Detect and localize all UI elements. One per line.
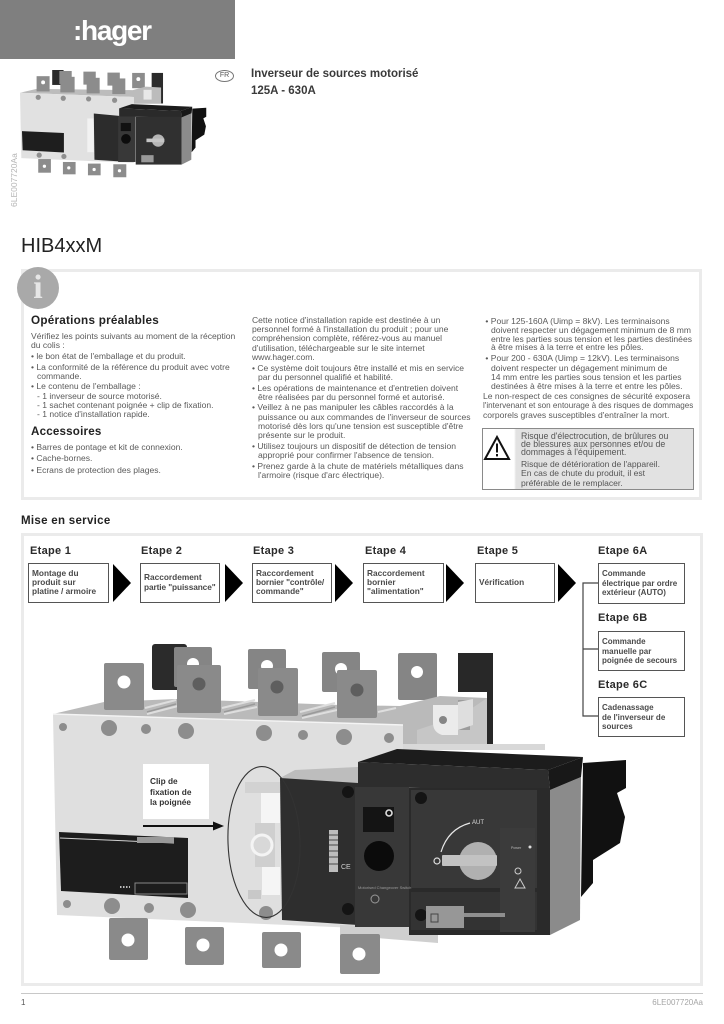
- text block: clearance requirements: 14 mm entre les parties sous tension et les parties: [491, 372, 682, 382]
- clip label text: Clip de: [150, 776, 178, 786]
- product photo: large: CE: [341, 864, 351, 871]
- text block: safety instructions: personnel formé à l'installation du produit ; pour une: [252, 324, 448, 334]
- text block: safety instructions: d'utilisation, téléchargeable sur le site internet: [252, 343, 425, 353]
- step 6A box: électrique par ordre: [602, 579, 677, 588]
- step 6A title: Etape 6A: [598, 545, 647, 557]
- text block: clearance requirements: à être mises à la terre et entre les pôles.: [491, 342, 644, 352]
- step 1 box: produit sur: [32, 577, 76, 587]
- text block: safety instructions: motorisé dès lors qu'une tension est susceptible d'être: [258, 421, 463, 431]
- step 5 box: Vérification: [479, 577, 524, 587]
- step 6A box: Commande: [602, 569, 646, 578]
- text block: accessoires: • Ecrans de protection des plages.: [31, 465, 161, 475]
- text block: operations prealables: [31, 331, 235, 419]
- text block: operations prealables: • La conformité de la référence du produit avec votre: [31, 362, 230, 372]
- text block: clearance requirements: Le non-respect de ces consignes de sécurité exposera: [483, 391, 690, 401]
- panel: mise en service: [21, 533, 703, 986]
- rating plate: [59, 832, 188, 898]
- rotary handle: [441, 823, 470, 852]
- text block: clearance requirements: destinées à être mises à la terre et entre les pôles.: [491, 381, 682, 391]
- connector tree to step 6 options: [582, 582, 598, 717]
- text block: accessoires: [31, 442, 183, 475]
- arrow step 5: [558, 564, 576, 602]
- text block: clearance requirements: • Pour 125-160A (Uimp = 8kV). Les terminaisons: [485, 316, 670, 326]
- step 6B box: Commande: [602, 637, 646, 646]
- step 6A box: extérieur (AUTO): [602, 588, 666, 597]
- step 6B: [598, 612, 685, 671]
- footer: page number: 1: [21, 998, 25, 1007]
- language badge FR: [215, 70, 234, 82]
- text block: clearance requirements: l'intervenant et son entourage à des risques de dommages: [483, 401, 693, 410]
- step 6A: [598, 545, 685, 604]
- step 2 box: partie "puissance": [144, 582, 216, 592]
- terminal fins: [53, 696, 487, 748]
- text block: operations prealables: • Le contenu de l'emballage :: [31, 381, 141, 391]
- text block: safety instructions: par du personnel qualifié et habilité.: [258, 372, 393, 382]
- step 6C title: Etape 6C: [598, 679, 647, 691]
- step 3 title: Etape 3: [253, 545, 294, 557]
- step 5 box: [475, 563, 555, 603]
- product photo: small: [20, 70, 206, 178]
- text block: clearance requirements: doivent respecter un dégagement minimum de 8 mm: [491, 325, 691, 335]
- arrow step 2: [225, 564, 243, 602]
- bracket at right end: [417, 698, 487, 747]
- text block: safety instructions: • Les opérations de maintenance et d'entretien doivent: [252, 383, 458, 393]
- text block: safety instructions: [252, 315, 471, 480]
- product photo: large: Motorised Changeover Switch: [358, 885, 411, 890]
- step 1 title: Etape 1: [30, 545, 71, 557]
- text block: operations prealables: • le bon état de l'emballage et du produit.: [31, 351, 186, 361]
- step 6B box: poignée de secours: [602, 656, 677, 665]
- text block: operations prealables: Vérifiez les points suivants au moment de la réception: [31, 331, 235, 341]
- body: [53, 714, 403, 930]
- product title: 125A - 630A: [251, 85, 316, 97]
- step 6B box: manuelle par: [602, 647, 651, 656]
- text block: clearance requirements: corporels graves susceptibles d'entraîner la mort.: [483, 410, 669, 420]
- text block: operations prealables: du colis :: [31, 340, 65, 350]
- text block: clearance requirements: doivent respecter un dégagement minimum de: [491, 363, 667, 373]
- text block: clearance requirements: [483, 316, 693, 420]
- text block: operations prealables: commande.: [37, 371, 82, 381]
- warning text: [521, 431, 668, 488]
- heading: mise en service: Mise en service: [21, 515, 111, 527]
- step 3 box: commande": [256, 586, 304, 596]
- clip ellipse: [225, 765, 303, 919]
- icon: warning triangle: [483, 435, 511, 460]
- header band with hager logo: [0, 0, 235, 59]
- text block: safety instructions: • Prenez garde à la chute de matériels métalliques dans: [252, 461, 464, 471]
- step 4 box: bornier: [367, 577, 396, 587]
- text block: accessoires: • Barres de pontage et kit de connexion.: [31, 442, 183, 452]
- warning text: préférable de le remplacer.: [521, 478, 623, 488]
- warning text: Risque de détérioration de l'appareil.: [521, 459, 660, 469]
- step 2 title: Etape 2: [141, 545, 182, 557]
- step 3 box: Raccordement: [256, 568, 314, 578]
- lower terminals: [340, 925, 438, 943]
- language badge FR: FR: [220, 72, 229, 79]
- clip label text: fixation de: [150, 786, 192, 796]
- arrow step 1: [113, 564, 131, 602]
- barcode: [329, 830, 338, 872]
- text block: safety instructions: l'armoire (risque d'arc électrique).: [258, 470, 384, 480]
- step 1 box: [28, 563, 109, 603]
- step 1 box: Montage du: [32, 568, 79, 578]
- side status: Power: [511, 846, 522, 850]
- text block: clearance requirements: • Pour 200 - 630A (Uimp = 12kV). Les terminaisons: [485, 353, 679, 363]
- clip label text: [150, 776, 192, 807]
- arrow: to clip: [143, 822, 224, 830]
- callout: clip de fixation label: [143, 764, 209, 819]
- text block: safety instructions: être réalisées par du personnel formé et autorisé.: [258, 392, 445, 402]
- text block: accessoires: • Cache-bornes.: [31, 453, 92, 463]
- step 3 box: [252, 563, 332, 603]
- step 2: [140, 545, 243, 603]
- vertical document reference: 6LE007720Aa: [9, 153, 19, 207]
- step 6C box: sources: [602, 722, 633, 731]
- text block: operations prealables: - 1 notice d'installation rapide.: [37, 409, 150, 419]
- text block: safety instructions: • Ce système doit toujours être installé et mis en service: [252, 363, 464, 373]
- rear terminals: [174, 647, 437, 700]
- front terminals: [104, 663, 377, 718]
- step 1: [28, 545, 131, 603]
- text block: safety instructions: approprié pour confirmer l'absence de tension.: [258, 450, 434, 460]
- step 4: [363, 545, 464, 603]
- padlock slide: [426, 906, 464, 928]
- text block: clearance requirements: entre les parties sous tension et les parties destinées: [491, 334, 692, 344]
- text block: safety instructions: www.hager.com.: [252, 352, 315, 362]
- text block: safety instructions: puissance ou aux commandes de l'inverseur de sources: [258, 412, 471, 422]
- step 2 box: Raccordement: [144, 572, 202, 582]
- step 6A box: [598, 563, 685, 604]
- text block: safety instructions: • Utilisez toujours un dispositif de détection de tension: [252, 441, 456, 451]
- callout: warning: [482, 428, 694, 490]
- warning text: de blessures aux personnes et/ou de: [521, 439, 665, 449]
- step 4 box: "alimentation": [367, 586, 424, 596]
- footer: document reference: 6LE007720Aa: [652, 998, 703, 1007]
- step 1 box: platine / armoire: [32, 586, 96, 596]
- clip label text: la poignée: [150, 797, 191, 807]
- step 4 box: [363, 563, 444, 603]
- icon: information: i: [33, 269, 43, 306]
- arrow step 3: [335, 564, 353, 602]
- step 6C box: [598, 697, 685, 737]
- warning text: En cas de chute du produit, il est: [521, 468, 645, 478]
- product photo: large: AUT: [472, 820, 484, 826]
- step 6C box: Cadenassage: [602, 703, 654, 712]
- heading: accessoires: Accessoires: [31, 425, 102, 438]
- logo: hager: :hager: [73, 15, 151, 46]
- arrow step 4: [446, 564, 464, 602]
- text block: safety instructions: Cette notice d'installation rapide est destinée à un: [252, 315, 440, 325]
- step 5: [475, 545, 576, 603]
- step 3: [252, 545, 353, 603]
- shadow above module: [280, 765, 400, 790]
- step 4 title: Etape 4: [365, 545, 406, 557]
- switch window and hole: [363, 807, 394, 832]
- dark module: [280, 778, 358, 925]
- motor rear block: [581, 760, 626, 897]
- product title: [251, 68, 418, 97]
- step 2 box: [140, 563, 220, 603]
- warning text: dommages à l'équipement.: [521, 447, 626, 457]
- text block: safety instructions: présente sur le produit.: [258, 430, 345, 440]
- step 5 title: Etape 5: [477, 545, 518, 557]
- warning text: Risque d'électrocution, de brûlures ou: [521, 431, 668, 441]
- text block: operations prealables: - 1 sachet contenant poignée + clip de fixation.: [37, 400, 214, 410]
- product reference heading: HIB4xxM: [21, 235, 102, 257]
- step 6B title: Etape 6B: [598, 612, 647, 624]
- handle clip: [245, 782, 280, 899]
- product title: Inverseur de sources motorisé: [251, 68, 418, 80]
- icon: information: [17, 267, 59, 309]
- heading: operations prealables: Opérations préalables: [31, 314, 159, 327]
- panel: safety and preparation information: [21, 269, 702, 500]
- rear black blocks: [152, 644, 187, 690]
- step 6C: [598, 679, 685, 737]
- text block: safety instructions: • Veillez à ne pas manipuler les câbles raccordés à la: [252, 402, 454, 412]
- step 4 box: Raccordement: [367, 568, 425, 578]
- step 6B box: [598, 631, 685, 671]
- text block: safety instructions: compréhension complète, référez-vous au manuel: [252, 333, 442, 343]
- text block: operations prealables: - 1 inverseur de source motorisé.: [37, 391, 162, 401]
- step 3 box: bornier "contrôle/: [256, 577, 324, 587]
- step 6C box: de l'inverseur de: [602, 713, 665, 722]
